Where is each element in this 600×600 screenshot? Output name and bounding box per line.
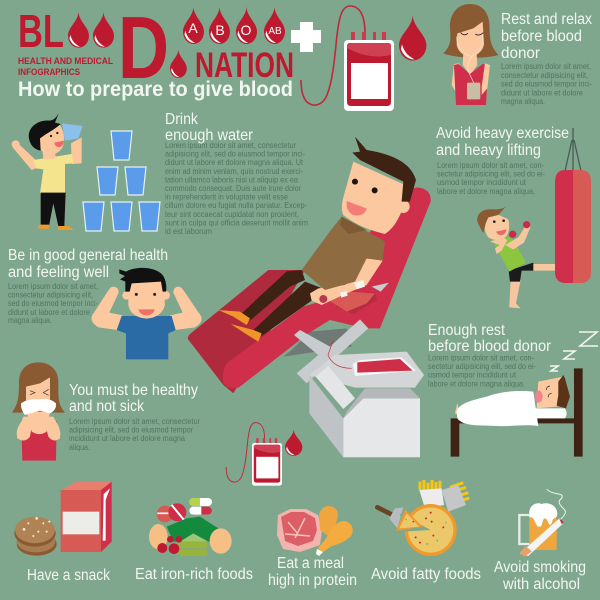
text block: avoid heavy exercise: labore et dolore magna aliqua. (437, 187, 535, 196)
text block: good general health: magna aliqua. (8, 316, 52, 325)
armrest (327, 290, 377, 314)
heading: good general health: and feeling well (8, 264, 109, 281)
label: eat a meal high in protein: Eat a meal (277, 555, 344, 572)
text block: drink water: cillum dolore eu fugiat nulla pariatur. Excep- (165, 201, 307, 210)
blood type drops: A (188, 20, 198, 36)
heading: enough rest: Enough rest (428, 322, 506, 339)
sleeping person in bed (451, 368, 583, 457)
title: blood donation (18, 0, 294, 97)
legs and shoes (218, 270, 327, 342)
gray frame (294, 319, 368, 383)
label: avoid fatty foods: Avoid fatty foods (371, 566, 481, 583)
text block: drink water: tation ullamco laboris nisi ut aliquip ex ea (165, 175, 299, 184)
boy kicking bag (477, 205, 555, 308)
icon: pizza and fries (377, 480, 469, 556)
heading: healthy and not sick: and not sick (69, 398, 144, 415)
sick woman with tissue (12, 362, 65, 461)
label: have a snack: Have a snack (27, 567, 110, 584)
text block: enough rest: sectetur adipisicing elit, sed do ei- (428, 362, 536, 371)
text block: enough rest: labore et dolore magna aliqua. (428, 380, 525, 388)
heading: good general health (8, 247, 168, 281)
title: blood donation: NATION (195, 46, 294, 85)
heading: drink enough water (165, 111, 253, 144)
text block: rest and relax (501, 62, 592, 106)
title: blood donation: HEALTH AND MEDICAL (18, 56, 113, 67)
blood type drops: AB (268, 26, 282, 37)
heading: enough rest (428, 322, 551, 355)
text block: healthy and not sick: aliqua. (69, 443, 90, 452)
text block: rest and relax: sed do eiusmod tempor inci- (501, 80, 592, 88)
text block: drink water: adipisicing elit, sed do eiusmod tempor inci- (165, 150, 305, 159)
heading: good general health: Be in good general health (8, 247, 168, 264)
torso (302, 217, 385, 305)
icon: snack (14, 482, 112, 556)
woman relaxing with earphones (443, 4, 499, 105)
label: avoid smoking with alcohol: Avoid smoking (494, 559, 586, 576)
heading: rest and relax (501, 11, 592, 62)
heading: healthy and not sick: You must be healthy (69, 382, 198, 399)
text block: avoid heavy exercise: Lorem ipsum dolor sit amet, con- (437, 161, 544, 170)
heading: avoid heavy exercise (436, 125, 569, 159)
text block: healthy and not sick (69, 417, 200, 452)
label: avoid smoking with alcohol: with alcohol (502, 576, 580, 593)
text block: rest and relax: Lorem ipsum dolor sit amet, (501, 62, 591, 71)
text block: drink water: Lorem ipsum dolor sit amet, consectetur (165, 141, 296, 150)
label: eat a meal high in protein (268, 555, 357, 589)
text block: rest and relax: didunt ut labore et dolore (501, 88, 584, 98)
head (342, 137, 416, 234)
blood type drops: B (215, 22, 225, 38)
blood type drops: O (241, 22, 252, 38)
text block: avoid heavy exercise: usmod tempor incididunt ut (437, 178, 527, 187)
label: eat a meal high in protein: high in protein (268, 572, 357, 589)
heading: drink enough water: enough water (165, 127, 253, 144)
text block: rest and relax: magna aliqua. (501, 97, 545, 106)
label: avoid smoking with alcohol (494, 559, 586, 593)
text block: healthy and not sick: incididunt ut labore et dolore magna (69, 434, 186, 443)
heading: avoid heavy exercise: Avoid heavy exercise (436, 125, 569, 142)
heading: healthy and not sick (69, 382, 198, 415)
title: blood donation: D (118, 0, 169, 97)
text block: drink water: sunt in culpa qui officia deserunt mollit anim (165, 218, 308, 227)
text block: healthy and not sick: Lorem ipsum dolor sit amet, consectetur (69, 417, 200, 426)
blood type drops (183, 5, 285, 44)
text block: drink water: didunt ut labore et dolore magna aliqua. Ut (165, 158, 304, 167)
icon: beer and cigarette (519, 489, 566, 557)
text block: good general health: didunt ut labore et dolore (8, 308, 91, 317)
chair (188, 187, 431, 393)
text block: avoid heavy exercise: sectetur adipisicing elit, sed do ei- (437, 170, 545, 178)
punching bag (555, 128, 591, 283)
text block: drink water: enim ad minim veniam, quis nostrud exerci- (165, 167, 303, 176)
subtitle: How to prepare to give blood (18, 78, 293, 101)
text block: avoid heavy exercise (437, 161, 545, 196)
icon: meat and chicken (277, 506, 353, 556)
heading: avoid heavy exercise: and heavy lifting (436, 142, 541, 159)
text block: good general health: consectetur adipisicing elit, (8, 290, 93, 300)
heading: rest and relax: before blood (501, 28, 582, 45)
text block: drink water: teur sint occaecat cupidatat non proident, (165, 210, 299, 219)
text block: good general health: sed do eiusmod tempor inci- (8, 299, 98, 308)
text block: healthy and not sick: adipisicing elit, sed do eiusmod tempor (69, 426, 193, 434)
text block: drink water: commodo consequat. Duis aute irure dolor (165, 184, 301, 193)
text block: good general health (8, 282, 98, 325)
text block: drink water: id est laborum (165, 227, 212, 236)
text block: enough rest (428, 354, 536, 388)
text block: enough rest: usmod tempor incididunt ut (428, 370, 517, 380)
muscular boy (91, 268, 202, 359)
icon: medical plus (291, 22, 321, 52)
man drinking water (12, 113, 83, 230)
donor in reclined chair (188, 137, 431, 393)
title: blood donation: BL (18, 5, 64, 57)
heading: drink enough water: Drink (165, 111, 198, 128)
small blood drop (285, 428, 302, 456)
text block: enough rest: Lorem ipsum dolor sit amet, con- (428, 354, 534, 362)
small blood bag (226, 423, 282, 486)
text block: drink water: in reprehenderit in voluptate velit esse (165, 193, 289, 202)
text block: good general health: Lorem ipsum dolor sit amet, (8, 282, 98, 291)
sleeping z letters (550, 332, 598, 371)
text block: rest and relax: consectetur adipisicing elit, (501, 71, 588, 80)
water glasses pyramid (83, 131, 160, 231)
heading: enough rest: before blood donor (428, 338, 551, 355)
label: eat iron-rich foods: Eat iron-rich foods (135, 566, 253, 583)
icon: large blood drop (399, 13, 426, 61)
title: blood donation: INFOGRAPHICS (18, 67, 80, 78)
icon: blood bag with tube (301, 6, 394, 111)
heading: rest and relax: Rest and relax (501, 11, 592, 28)
icon: iron rich foods (149, 498, 232, 556)
heading: rest and relax: donor (501, 45, 540, 62)
text block: drink water (165, 141, 308, 236)
blood collection machine (309, 340, 424, 457)
